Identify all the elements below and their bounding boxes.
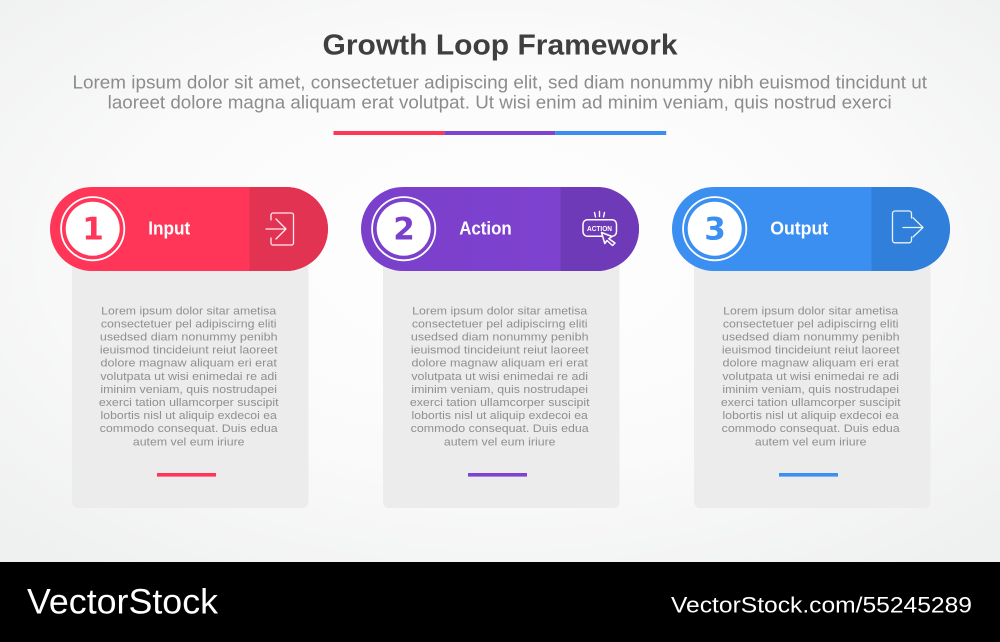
input number badge <box>61 197 124 260</box>
output body text: lobortis nisl ut aliquip exdecoi ea <box>723 410 900 422</box>
output body text: ieuismod tincideiunt reiut laoreet <box>722 345 900 357</box>
action header pill <box>361 187 640 271</box>
action body text: ieuismod tincideiunt reiut laoreet <box>411 345 589 357</box>
action body text: volutpata ut wisi enimedai re adi <box>411 371 588 383</box>
output body text: commodo consequat. Duis edua <box>722 423 900 435</box>
panel: output <box>672 187 950 508</box>
output body card <box>694 240 930 508</box>
watermark logo text: VectorStock <box>27 582 219 621</box>
input body text: Lorem ipsum dolor sitar ametisa <box>101 305 277 317</box>
input body text: autem vel eum iriure <box>133 436 245 448</box>
action body text: consectetuer pel adipiscirng eliti <box>412 318 588 330</box>
icon: sign in arrow <box>266 213 294 245</box>
action number badge: 2 <box>393 211 415 247</box>
action body text: autem vel eum iriure <box>444 436 556 448</box>
panel: action <box>361 187 640 508</box>
input number badge: 1 <box>82 211 104 247</box>
action body text: lobortis nisl ut aliquip exdecoi ea <box>412 410 589 422</box>
action label: Action <box>459 218 512 238</box>
output number badge: 3 <box>704 211 726 247</box>
action body text: Lorem ipsum dolor sitar ametisa <box>412 305 588 317</box>
output body text: exerci tation ullamcorper suscipit <box>721 397 901 409</box>
icon: action button click <box>583 212 616 246</box>
output number badge <box>683 197 746 260</box>
output body text: usedsed diam nonummy penibh <box>722 332 900 344</box>
watermark image id: VectorStock.com/55245289 <box>671 592 972 617</box>
title: Growth Loop Framework <box>322 30 678 62</box>
input body text: exerci tation ullamcorper suscipit <box>99 397 279 409</box>
input label: Input <box>148 218 190 238</box>
input accent rule <box>157 473 216 477</box>
input body card <box>72 240 308 508</box>
output body text: consectetuer pel adipiscirng eliti <box>723 318 899 330</box>
output body text: dolore magnaw aliquam eri erat <box>723 358 900 370</box>
icon: sign out arrow <box>892 211 923 243</box>
input body text <box>99 305 279 448</box>
input body text: consectetuer pel adipiscirng eliti <box>101 318 277 330</box>
panel: input <box>50 187 328 508</box>
action body text <box>410 305 590 448</box>
tri-colour heading rule <box>334 131 666 135</box>
output body text: volutpata ut wisi enimedai re adi <box>722 371 899 383</box>
input body text: ieuismod tincideiunt reiut laoreet <box>100 345 278 357</box>
action body text: commodo consequat. Duis edua <box>411 423 589 435</box>
input header pill <box>50 187 328 271</box>
output header pill <box>672 187 950 271</box>
output body text <box>721 305 901 448</box>
action body card <box>383 240 620 508</box>
input body text: lobortis nisl ut aliquip exdecoi ea <box>101 410 278 422</box>
action accent rule <box>468 473 527 477</box>
input body text: commodo consequat. Duis edua <box>100 423 278 435</box>
icon: action button click: ACTION <box>587 226 612 233</box>
action body text: iminim veniam, quis nostrudapei <box>411 384 588 396</box>
output accent rule <box>779 473 838 477</box>
watermark footer bar <box>0 562 1000 642</box>
subtitle text: laoreet dolore magna aliquam erat volutpat. Ut wisi enim ad minim veniam, quis nostrud exerci <box>108 92 892 112</box>
output body text: Lorem ipsum dolor sitar ametisa <box>723 305 899 317</box>
action body text: dolore magnaw aliquam eri erat <box>412 358 589 370</box>
action body text: usedsed diam nonummy penibh <box>411 332 589 344</box>
subtitle text: Lorem ipsum dolor sit amet, consectetuer adipiscing elit, sed diam nonummy nibh euismod tincidunt ut <box>72 72 927 92</box>
input body text: dolore magnaw aliquam eri erat <box>101 358 278 370</box>
subtitle text <box>72 72 927 112</box>
output body text: iminim veniam, quis nostrudapei <box>722 384 899 396</box>
input body text: iminim veniam, quis nostrudapei <box>100 384 277 396</box>
input body text: volutpata ut wisi enimedai re adi <box>100 371 277 383</box>
action number badge <box>372 197 435 260</box>
output body text: autem vel eum iriure <box>755 436 867 448</box>
input body text: usedsed diam nonummy penibh <box>100 332 278 344</box>
output label: Output <box>770 218 828 238</box>
action body text: exerci tation ullamcorper suscipit <box>410 397 590 409</box>
